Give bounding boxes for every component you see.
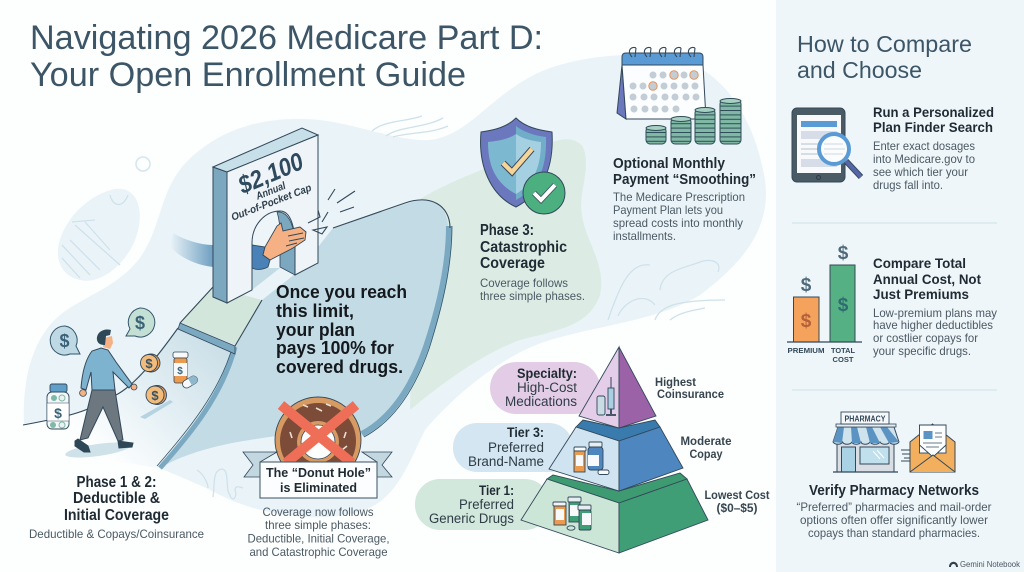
tier label: tier 1: Tier 1: bbox=[479, 483, 514, 498]
bar chart: premium vs total cost: $ bbox=[838, 295, 849, 316]
banner: donut hole eliminated: The “Donut Hole” bbox=[266, 466, 371, 480]
text: total annual cost: Compare Total bbox=[873, 255, 966, 271]
pyramid middle tier bbox=[549, 420, 683, 491]
tier pill: tier 1 bbox=[415, 479, 550, 530]
bar chart: premium vs total cost: $ bbox=[838, 243, 849, 264]
panel: how to compare bbox=[776, 0, 1024, 572]
cost label: highest: Coinsurance bbox=[657, 389, 724, 401]
icon: cost cap door bbox=[213, 128, 318, 303]
icon: coin lower bbox=[146, 386, 166, 404]
icon: pill jar: $ bbox=[54, 405, 62, 421]
text: monthly payment smoothing: Optional Monthly bbox=[613, 155, 726, 172]
tier label: specialty: High-Cost bbox=[517, 380, 577, 395]
bar chart: premium vs total cost: COST bbox=[832, 355, 854, 364]
person shadow bbox=[64, 439, 132, 461]
bar chart: premium vs total cost: $ bbox=[801, 275, 812, 296]
text: total annual cost: Annual Cost, Not bbox=[873, 271, 981, 287]
icon: pill jar bbox=[47, 384, 69, 429]
shoes bbox=[75, 439, 133, 452]
icon: shield bbox=[481, 118, 552, 207]
cost label: lowest bbox=[704, 490, 770, 515]
green road segment bbox=[178, 287, 262, 354]
cost label: moderate: Moderate bbox=[680, 436, 732, 448]
text: donut explanation: Coverage now follows bbox=[262, 505, 374, 519]
text: pharmacy networks: copays than standard pharmacies. bbox=[808, 526, 980, 540]
bar chart: premium vs total cost: PREMIUM bbox=[788, 346, 824, 355]
icon: speech bubble dollar right: $ bbox=[135, 313, 145, 333]
door arch opening bbox=[252, 212, 280, 290]
text: monthly payment smoothing bbox=[613, 155, 756, 243]
text: phase 3: Coverage bbox=[480, 255, 545, 272]
text: total annual cost: or costlier copays for bbox=[873, 331, 978, 345]
banner: donut hole eliminated: is Eliminated bbox=[280, 481, 357, 495]
icon: coin stacks bbox=[646, 98, 741, 144]
text: pharmacy networks: Verify Pharmacy Networks bbox=[809, 483, 979, 499]
tier label: specialty: Specialty: bbox=[517, 366, 577, 381]
bar chart: premium vs total cost: $ bbox=[801, 311, 812, 332]
pyramid base tier bbox=[521, 473, 708, 553]
decorative ring bbox=[136, 157, 150, 171]
tier label: tier 1 bbox=[429, 483, 514, 526]
pyramid top tier bbox=[579, 347, 656, 428]
icon: orange pill bottle: $ bbox=[177, 366, 183, 377]
icon: coin upper bbox=[140, 354, 160, 372]
tier label: tier 3: Tier 3: bbox=[507, 425, 544, 440]
calendar days bbox=[630, 71, 700, 112]
tier label: specialty bbox=[505, 366, 577, 409]
door left side bbox=[213, 167, 227, 303]
text: donut explanation: Deductible, Initial Coverage, bbox=[248, 532, 390, 546]
door top bbox=[213, 128, 318, 172]
text: phase 3: Catastrophic bbox=[480, 239, 567, 256]
icon: calendar bbox=[617, 47, 706, 119]
callout: limit: covered drugs. bbox=[276, 356, 403, 377]
panel heading: How to Compare bbox=[797, 31, 972, 57]
text: monthly payment smoothing: Payment “Smoothing” bbox=[613, 171, 756, 188]
callout: limit bbox=[276, 281, 407, 377]
callout: limit: your plan bbox=[276, 319, 355, 340]
icon: tier 3 bottles bbox=[574, 442, 609, 474]
text: donut explanation bbox=[248, 505, 390, 559]
cap label: Out-of-Pocket Cap bbox=[230, 182, 314, 224]
icon: mail order envelope bbox=[901, 424, 955, 472]
callout: limit: Once you reach bbox=[276, 281, 407, 302]
icon: coin upper: $ bbox=[145, 356, 153, 371]
icon: hand pushing through door bbox=[252, 223, 306, 269]
pants bbox=[80, 390, 123, 441]
icon: capsule bbox=[181, 375, 199, 389]
text: phase 1 and 2: Deductible & Copays/Coinsurance bbox=[29, 527, 204, 541]
text: plan finder: Enter exact dosages bbox=[873, 139, 975, 153]
tier pill: specialty bbox=[490, 362, 600, 414]
cost label: moderate bbox=[680, 436, 732, 461]
text: total annual cost: Low-premium plans may bbox=[873, 306, 997, 320]
text: phase 1 and 2: Initial Coverage bbox=[64, 507, 169, 524]
text: phase 1 and 2: Phase 1 & 2: bbox=[76, 474, 156, 491]
icon: crack burst bbox=[308, 189, 355, 234]
icon: walking person bbox=[75, 329, 137, 452]
icon: vial bbox=[597, 396, 605, 415]
calendar rings bbox=[629, 47, 695, 57]
icon: orange pill bottle bbox=[173, 352, 188, 383]
text: total annual cost: your specific drugs. bbox=[873, 344, 971, 358]
big road surface bbox=[160, 199, 452, 468]
tier label: tier 1: Generic Drugs bbox=[429, 511, 514, 526]
arm behind door bbox=[170, 233, 213, 267]
text: plan finder: Run a Personalized bbox=[873, 104, 994, 120]
text: pharmacy networks: “Preferred” pharmacies and mail-order bbox=[796, 500, 992, 514]
icon: pharmacy storefront: PHARMACY bbox=[844, 414, 886, 424]
text: phase 3: Phase 3: bbox=[480, 222, 534, 239]
text: monthly payment smoothing: installments. bbox=[613, 229, 676, 243]
decorative squiggles bbox=[197, 469, 243, 499]
decorative waves lower right bbox=[608, 260, 725, 320]
panel heading bbox=[797, 31, 972, 83]
watermark: Gemini Notebook bbox=[960, 559, 1021, 569]
text: phase 3: Coverage follows bbox=[480, 276, 568, 290]
cost label: moderate: Copay bbox=[690, 449, 723, 461]
text: plan finder: Plan Finder Search bbox=[873, 119, 993, 135]
title: Your Open Enrollment Guide bbox=[30, 56, 466, 94]
icon: tier 1 bottles bbox=[553, 497, 591, 530]
text: monthly payment smoothing: spread costs into monthly bbox=[613, 216, 743, 230]
icon: speech bubble dollar left bbox=[50, 326, 80, 355]
door front bbox=[227, 135, 318, 303]
icon: pharmacy storefront bbox=[833, 412, 899, 472]
icon: coin lower: $ bbox=[151, 388, 159, 403]
background blob bbox=[24, 55, 766, 517]
icon: tablet with magnifier bbox=[792, 108, 861, 182]
head bbox=[103, 336, 113, 349]
text: phase 3: three simple phases. bbox=[480, 289, 585, 303]
text: pharmacy networks: options often offer significantly lower bbox=[800, 513, 988, 527]
decorative oval bbox=[58, 189, 140, 281]
text: total annual cost: have higher deductibles bbox=[873, 318, 993, 332]
text: plan finder: into Medicare.gov to bbox=[873, 152, 975, 166]
text: donut explanation: and Catastrophic Coverage bbox=[250, 545, 388, 559]
title: Navigating 2026 Medicare Part D: bbox=[30, 19, 543, 57]
door arch reveal bbox=[277, 212, 295, 275]
text: plan finder bbox=[873, 104, 994, 192]
green blob bbox=[410, 139, 601, 410]
tier pill: tier 3 bbox=[453, 423, 573, 472]
text: phase 3 bbox=[480, 222, 585, 303]
icon: green check badge bbox=[523, 172, 565, 214]
title bbox=[30, 19, 543, 94]
shirt bbox=[81, 348, 132, 390]
cost label: lowest: Lowest Cost bbox=[704, 490, 770, 502]
icon: speech bubble dollar left: $ bbox=[59, 331, 70, 351]
pyramid chart bbox=[521, 347, 708, 553]
callout: limit: pays 100% for bbox=[276, 337, 394, 358]
cost label: highest: Highest bbox=[655, 377, 696, 389]
cap amount: $2,100 bbox=[233, 147, 308, 200]
tier label: tier 3: Brand-Name bbox=[468, 454, 544, 469]
bar chart: premium vs total cost bbox=[787, 243, 862, 364]
tier label: tier 3: Preferred bbox=[488, 440, 544, 455]
tier label: tier 1: Preferred bbox=[459, 497, 514, 512]
text: monthly payment smoothing: Payment Plan lets you bbox=[613, 203, 723, 217]
text: plan finder: drugs fall into. bbox=[873, 178, 943, 192]
text: donut explanation: three simple phases: bbox=[265, 518, 371, 532]
hands bbox=[80, 390, 86, 396]
annual label: Annual bbox=[253, 179, 288, 203]
icon: speech bubble dollar right bbox=[126, 308, 155, 337]
lower road segment bbox=[23, 328, 235, 468]
cost label: lowest: ($0–$5) bbox=[716, 503, 758, 515]
text: total annual cost bbox=[873, 255, 997, 358]
cost label: highest bbox=[655, 377, 724, 401]
text: total annual cost: Just Premiums bbox=[873, 286, 969, 302]
bar chart: premium vs total cost: TOTAL bbox=[831, 346, 855, 355]
text: plan finder: see which tier your bbox=[873, 165, 968, 179]
coin shadow bbox=[140, 400, 173, 419]
text: phase 1 and 2: Deductible & bbox=[73, 490, 160, 507]
panel heading: and Choose bbox=[797, 57, 922, 83]
text: monthly payment smoothing: The Medicare Prescription bbox=[613, 190, 745, 204]
text: phase 1 and 2 bbox=[29, 474, 204, 541]
icon: crossed donut bbox=[275, 397, 361, 483]
tier label: specialty: Medications bbox=[505, 394, 577, 409]
tier label: tier 3 bbox=[468, 425, 544, 469]
callout: limit: this limit, bbox=[276, 300, 354, 321]
text: pharmacy networks bbox=[796, 483, 992, 540]
decorative top lines bbox=[372, 116, 448, 137]
banner: donut hole eliminated bbox=[243, 452, 392, 498]
icon: syringe bbox=[606, 377, 616, 415]
